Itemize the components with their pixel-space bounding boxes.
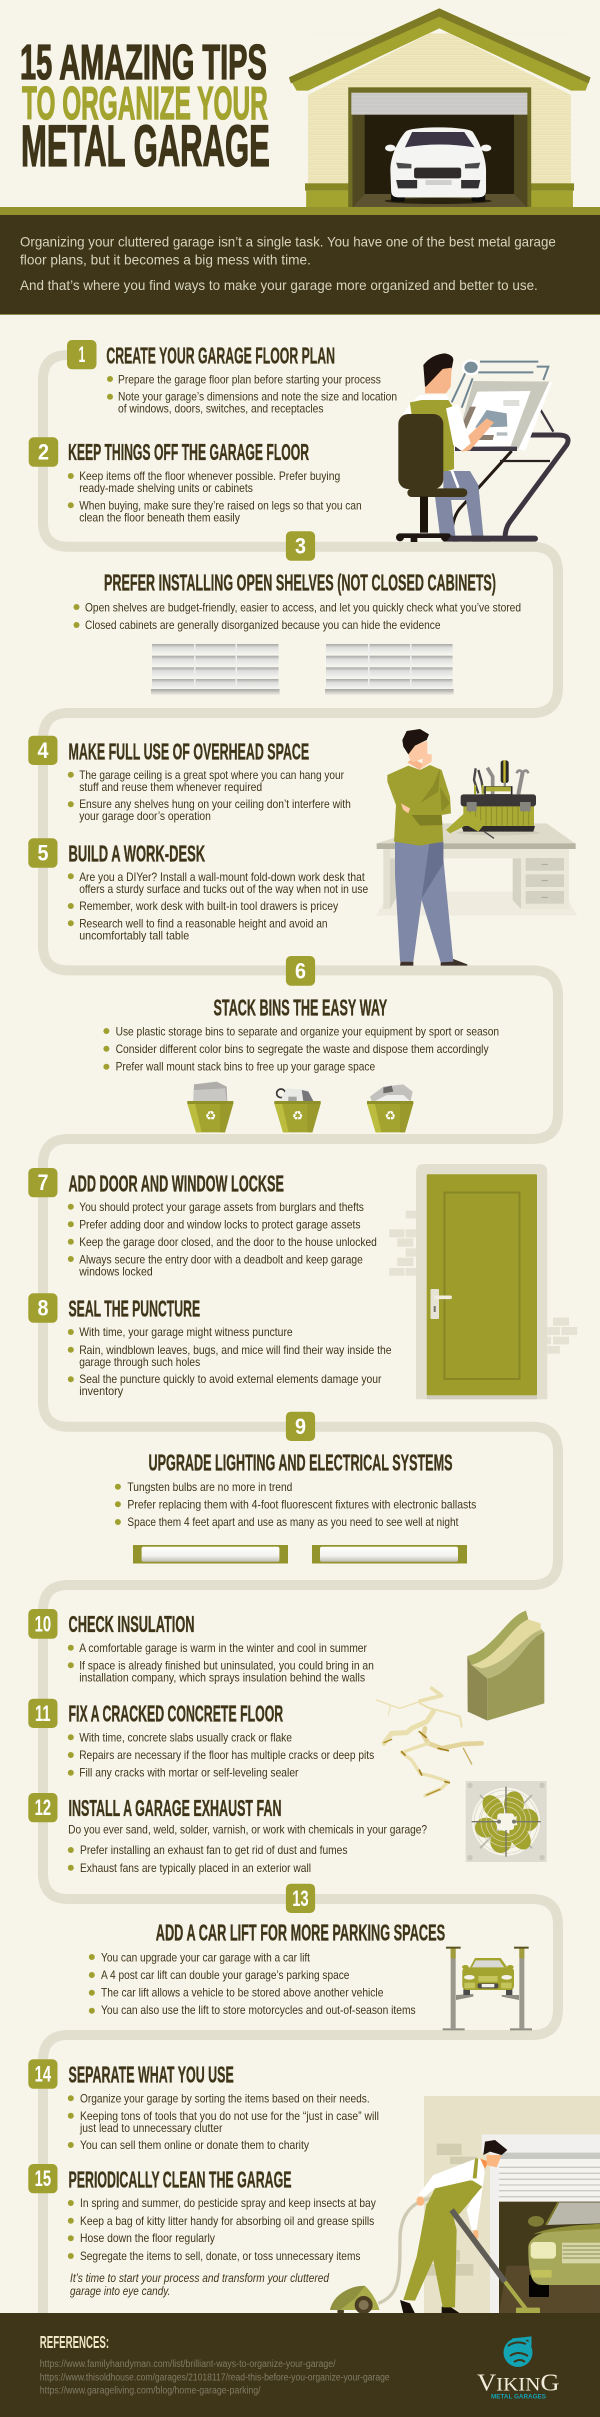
bullets 6 xyxy=(103,1024,499,1074)
bullets 13: A 4 post car lift can double your garage’s parking space xyxy=(101,1968,350,1982)
bullets 2: clean the floor beneath them easily xyxy=(79,510,240,524)
bullets 3 xyxy=(74,600,521,632)
panel: tip 4 xyxy=(28,736,351,823)
panel: tip 7 xyxy=(28,1168,377,1278)
reference links: https://www.garageliving.com/blog/home-garage-parking/ xyxy=(40,2386,261,2397)
bullets 6: Consider different color bins to segregate the waste and dispose them accordingly xyxy=(116,1042,489,1056)
bullets 14 xyxy=(68,2092,379,2152)
references heading: REFERENCES: xyxy=(40,2332,109,2352)
badge 10 xyxy=(28,1609,58,1639)
bullets 1 xyxy=(107,372,397,416)
bullets 15: In spring and summer, do pesticide spray and keep insects at bay xyxy=(80,2196,376,2210)
badge 6 xyxy=(286,956,315,986)
icon: garage with car xyxy=(289,8,591,207)
illustration: open shelves left xyxy=(151,644,280,695)
illustration: man at drafting desk xyxy=(396,353,568,542)
illustration: recycling bins xyxy=(187,1082,413,1132)
bullets 10: installation company, which sprays insulation behind the walls xyxy=(79,1670,365,1684)
closing italic note: garage into eye candy. xyxy=(70,2284,170,2298)
bullets 15: Hose down the floor regularly xyxy=(80,2231,215,2245)
bullets 15: Segregate the items to sell, donate, or toss unnecessary items xyxy=(80,2249,360,2263)
intro text: Organizing your cluttered garage isn’t a single task. You have one of the best metal garage xyxy=(20,234,556,250)
bullets 15: Keep a bag of kitty litter handy for absorbing oil and grease spills xyxy=(80,2214,374,2228)
reference links xyxy=(40,2359,390,2397)
bullets 8: Rain, windblown leaves, bugs, and mice will find their way inside the xyxy=(79,1343,392,1357)
logo: Viking Metal Garages: METAL GARAGES xyxy=(491,2395,546,2401)
bullets 7: windows locked xyxy=(78,1264,153,1278)
bullets 4: Ensure any shelves hung on your ceiling don’t interfere with xyxy=(79,797,351,811)
closing italic note: It’s time to start your process and transform your cluttered xyxy=(70,2271,329,2285)
heading 2: KEEP THINGS OFF THE GARAGE FLOOR xyxy=(68,439,309,465)
bullets 7: Keep the garage door closed, and the door to the house unlocked xyxy=(79,1235,377,1249)
bullets 5: Remember, work desk with built-in tool drawers is pricey xyxy=(79,899,338,913)
badge 4: 4 xyxy=(38,738,49,763)
icon: car xyxy=(385,127,491,202)
bullets 7 xyxy=(68,1200,377,1278)
icon: exhaust fan xyxy=(466,1781,547,1862)
bullets 9: Prefer replacing them with 4-foot fluorescent fixtures with electronic ballasts xyxy=(127,1498,476,1512)
illustration: recycling bins: ♻ xyxy=(385,1108,396,1123)
bullets 1: Prepare the garage floor plan before starting your process xyxy=(118,372,381,386)
badge 2 xyxy=(29,437,58,467)
panel: tip 10 xyxy=(28,1609,374,1684)
bullets 13: You can upgrade your car garage with a car lift xyxy=(101,1950,311,1964)
badge 8 xyxy=(28,1293,58,1323)
bullets 9: Tungsten bulbs are no more in trend xyxy=(127,1480,292,1494)
panel: tip 5 xyxy=(28,838,368,942)
badge 3 xyxy=(286,531,315,561)
bullets 5: offers a sturdy surface and tucks out of the way when not in use xyxy=(79,882,368,896)
bullets 11 xyxy=(68,1730,374,1780)
bullets 2: Keep items off the floor whenever possible. Prefer buying xyxy=(79,469,340,483)
title: TO ORGANIZE YOUR xyxy=(22,77,268,129)
icon: insulation xyxy=(467,1611,544,1721)
bullets 9: Space them 4 feet apart and use as many as you need to see well at night xyxy=(127,1515,459,1529)
bullets 7: Prefer adding door and window locks to protect garage assets xyxy=(79,1218,360,1232)
badge 15 xyxy=(28,2164,58,2193)
badge 7 xyxy=(28,1168,58,1197)
illustration: recycling bins: ♻ xyxy=(205,1108,216,1123)
winding track xyxy=(43,355,558,2315)
reference links: https://www.thisoldhouse.com/garages/21018117/read-this-before-you-organize-your-garage xyxy=(40,2372,390,2383)
badge 5 xyxy=(28,838,58,868)
badge 10: 10 xyxy=(35,1611,51,1636)
bullets 2: When buying, make sure they’re raised on legs so that you can xyxy=(79,498,362,512)
heading 14: SEPARATE WHAT YOU USE xyxy=(68,2062,234,2088)
bullets 3: Open shelves are budget-friendly, easier to access, and let you quickly check what you’ve stored xyxy=(85,600,521,614)
badge 2: 2 xyxy=(38,440,49,464)
bullets 4: your garage door’s operation xyxy=(79,809,211,823)
panel: tip 1 xyxy=(67,340,397,416)
intro text xyxy=(20,234,556,293)
badge 14: 14 xyxy=(35,2062,52,2086)
heading 11: FIX A CRACKED CONCRETE FLOOR xyxy=(68,1701,283,1727)
bullets 12 xyxy=(68,1843,348,1875)
bullets 3: Closed cabinets are generally disorganized because you can hide the evidence xyxy=(85,618,441,632)
heading 10: CHECK INSULATION xyxy=(68,1611,194,1637)
heading 4: MAKE FULL USE OF OVERHEAD SPACE xyxy=(68,738,309,764)
panel: tip 14 xyxy=(28,2059,379,2152)
bullets 4: The garage ceiling is a great spot where you can hang your xyxy=(79,768,344,782)
illustration: man vacuuming garage xyxy=(330,2096,600,2315)
intro question: Do you ever sand, weld, solder, varnish, or work with chemicals in your garage? xyxy=(68,1822,427,1836)
badge 5: 5 xyxy=(38,840,48,865)
bullets 1: Note your garage’s dimensions and note the size and location xyxy=(118,390,397,404)
bullets 4 xyxy=(68,768,351,823)
icon: floor crack xyxy=(377,1688,482,1796)
bullets 11: Fill any cracks with mortar or self-leveling sealer xyxy=(79,1766,298,1780)
panel: tip 13 xyxy=(89,1884,532,2030)
badge 12 xyxy=(28,1793,58,1822)
badge 1 xyxy=(67,340,96,369)
panel: tip 3 xyxy=(74,531,521,695)
bullets 13 xyxy=(89,1950,416,2017)
bullets 14: You can sell them online or donate them to charity xyxy=(80,2138,309,2152)
bullets 11: Repairs are necessary if the floor has multiple cracks or deep pits xyxy=(79,1748,374,1762)
panel: tip 9 xyxy=(115,1412,476,1564)
bullets 10: If space is already finished but uninsulated, you could bring in an xyxy=(79,1658,374,1672)
intro text: And that’s where you find ways to make your garage more organized and better to use. xyxy=(20,277,538,293)
badge 6: 6 xyxy=(295,958,306,983)
bullets 4: stuff and reuse them whenever required xyxy=(79,780,262,794)
logo: Viking Metal Garages: VIKING xyxy=(477,2371,560,2397)
vacuum hose xyxy=(378,2198,453,2303)
heading 7: ADD DOOR AND WINDOW LOCKSE xyxy=(68,1170,284,1196)
bullets 8: garage through such holes xyxy=(79,1355,200,1369)
badge 7: 7 xyxy=(38,1170,48,1195)
heading 6: STACK BINS THE EASY WAY xyxy=(214,994,387,1020)
panel: tip 12 xyxy=(28,1793,427,1875)
panel: tip 6 xyxy=(103,956,499,1132)
illustration: recycling bins: ♻ xyxy=(292,1108,303,1123)
badge 8: 8 xyxy=(38,1296,48,1320)
bullets 2 xyxy=(68,469,362,524)
badge 4 xyxy=(28,736,58,765)
door handle xyxy=(430,1289,452,1319)
bullets 14: just lead to unnecessary clutter xyxy=(79,2121,222,2135)
bullets 2: ready-made shelving units or cabinets xyxy=(79,481,253,495)
bullets 6: Prefer wall mount stack bins to free up your garage space xyxy=(116,1060,375,1074)
title: 15 AMAZING TIPS xyxy=(20,36,267,90)
reference links: https://www.familyhandyman.com/list/brilliant-ways-to-organize-your-garage/ xyxy=(40,2359,336,2370)
bullets 7: Always secure the entry door with a deadbolt and keep garage xyxy=(79,1252,363,1266)
badge 11: 11 xyxy=(35,1701,50,1726)
badge 13 xyxy=(286,1884,315,1913)
bullets 7: You should protect your garage assets from burglars and thefts xyxy=(79,1200,364,1214)
bullets 11: With time, concrete slabs usually crack or flake xyxy=(79,1730,292,1744)
illustration: open shelves right xyxy=(325,644,454,695)
bullets 8: inventory xyxy=(79,1384,123,1398)
badge 9: 9 xyxy=(295,1414,306,1439)
bullets 14: Organize your garage by sorting the items based on their needs. xyxy=(80,2092,370,2106)
bullets 5 xyxy=(68,870,368,942)
title xyxy=(20,36,270,179)
panel: tip 15 xyxy=(28,2164,376,2298)
heading 12: INSTALL A GARAGE EXHAUST FAN xyxy=(68,1795,282,1821)
logo: Viking Metal Garages xyxy=(477,2338,560,2401)
bullets 9 xyxy=(115,1480,476,1529)
illustration: insulation block, crack and fan xyxy=(377,1611,547,1862)
bullets 1: of windows, doors, switches, and receptacles xyxy=(118,402,324,416)
illustration: fluorescent fixture right xyxy=(312,1545,467,1564)
bullets 8 xyxy=(68,1325,392,1398)
bullets 13: The car lift allows a vehicle to be stored above another vehicle xyxy=(101,1986,384,2000)
bullets 10: A comfortable garage is warm in the winter and cool in summer xyxy=(79,1641,367,1655)
bullets 5: uncomfortably tall table xyxy=(79,928,189,942)
badge 12: 12 xyxy=(35,1795,51,1820)
panel: tip 2 xyxy=(29,437,362,524)
illustration: man with toolbox at workbench xyxy=(376,729,577,966)
panel: tip 8 xyxy=(28,1293,392,1398)
intro text: floor plans, but it becomes a big mess with time. xyxy=(20,252,311,268)
badge 9 xyxy=(286,1412,315,1441)
bullets 8: With time, your garage might witness puncture xyxy=(79,1325,293,1339)
closing italic note xyxy=(70,2271,329,2298)
bullets 6: Use plastic storage bins to separate and organize your equipment by sport or season xyxy=(116,1024,499,1038)
bullets 5: Research well to find a reasonable height and avoid an xyxy=(79,916,328,930)
bullets 12: Exhaust fans are typically placed in an exterior wall xyxy=(80,1861,311,1875)
bullets 10 xyxy=(68,1641,374,1684)
badge 1: 1 xyxy=(78,342,85,367)
illustration: door with bricks xyxy=(389,1164,577,1399)
panel: tip 11 xyxy=(28,1699,374,1780)
bullets 13: You can also use the lift to store motorcycles and out-of-season items xyxy=(101,2003,416,2017)
heading 1: CREATE YOUR GARAGE FLOOR PLAN xyxy=(106,342,335,368)
illustration: fluorescent fixture left xyxy=(133,1545,288,1564)
badge 13: 13 xyxy=(292,1886,309,1911)
bullets 14: Keeping tons of tools that you do not use for the “just in case” will xyxy=(80,2109,379,2123)
bullets 8: Seal the puncture quickly to avoid external elements damage your xyxy=(79,1372,381,1386)
title: METAL GARAGE xyxy=(21,114,270,179)
badge 14 xyxy=(28,2059,58,2089)
illustration: car lift xyxy=(443,1947,532,2030)
badge 15: 15 xyxy=(35,2166,51,2191)
heading 8: SEAL THE PUNCTURE xyxy=(68,1296,200,1322)
heading 5: BUILD A WORK-DESK xyxy=(68,840,205,866)
bullets 5: Are you a DIYer? Install a wall-mount fold-down work desk that xyxy=(79,870,365,884)
intro band xyxy=(0,207,600,315)
bullets 15 xyxy=(68,2196,376,2263)
bullets 12: Prefer installing an exhaust fan to get rid of dust and fumes xyxy=(80,1843,348,1857)
badge 3: 3 xyxy=(295,534,306,558)
badge 11 xyxy=(28,1699,58,1728)
footer xyxy=(0,2313,600,2417)
heading 15: PERIODICALLY CLEAN THE GARAGE xyxy=(68,2167,292,2193)
